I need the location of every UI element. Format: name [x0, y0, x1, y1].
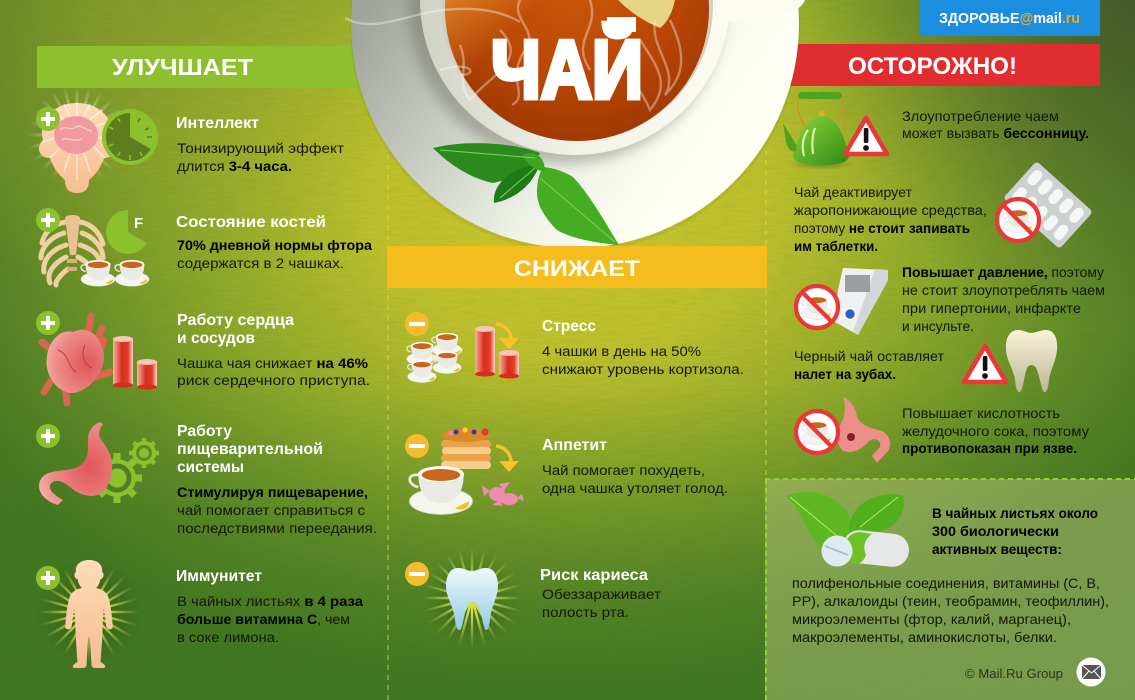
icon: no tea sign [997, 199, 1039, 241]
icon: pie chart 70% fluoride: F [134, 215, 143, 232]
item: intellect [21, 79, 345, 193]
item: ulcer [796, 397, 1089, 463]
banner: yellow, reduces [387, 246, 767, 288]
badge: minus [405, 434, 429, 458]
text: intellect [177, 140, 345, 174]
icon: two tea cups [81, 260, 149, 286]
text: appetite: Чай помогает похудеть, [542, 462, 705, 478]
mint leaves [433, 143, 619, 245]
text: digestion: чай помогает справиться с [177, 502, 365, 518]
text: bones: содержатся в 2 чашках. [177, 255, 344, 271]
badge: minus [405, 312, 429, 336]
text: appetite: одна чашка утоляет голод. [542, 480, 728, 496]
icon: pie chart 70% fluoride [106, 210, 147, 254]
banner: red, caution [785, 44, 1100, 86]
text: blood pressure [902, 264, 1105, 334]
icon: stomach [39, 422, 112, 505]
text: pills: поэтому не стоит запивать [794, 220, 970, 236]
heading: heart [177, 312, 294, 347]
icon: blue tooth with rays [416, 542, 528, 654]
text: pills: Чай деактивирует [794, 184, 913, 200]
panel: improves [21, 79, 377, 668]
heading: appetite: Аппетит [542, 437, 607, 454]
item: insomnia [783, 92, 1089, 170]
icon: green kettle [783, 92, 856, 170]
item: tooth stain [794, 330, 1057, 392]
text: digestion: последствиями переедания. [177, 520, 377, 536]
icon: no tea sign [796, 286, 838, 328]
icon: warning triangle [964, 346, 1006, 382]
item: digestion [36, 422, 377, 536]
banner: green, improves: УЛУЧШАЕТ [112, 54, 253, 80]
text: leaves intro: В чайных листьях около [932, 505, 1098, 521]
icon: rib cage [41, 215, 103, 285]
heading: stress: Стресс [542, 318, 596, 335]
text: immunity: В чайных листьях в 4 раза [177, 593, 363, 609]
item: pills [794, 161, 1093, 254]
heading: digestion: системы [177, 459, 244, 476]
text: blood pressure: при гипертонии, инфаркте [902, 300, 1081, 316]
text: pills: жаропонижающие средства, [794, 202, 987, 218]
heading: heart: Работу сердца [177, 312, 294, 329]
icon: heart [42, 316, 110, 403]
badge: plus [36, 424, 60, 448]
banner: green, improves [37, 46, 362, 88]
logo: Здоровье@mail.ru: ЗДОРОВЬЕ@mail.ru [939, 10, 1080, 27]
icon: stained tooth [1006, 330, 1057, 392]
text: leaves intro: 300 биологически [932, 523, 1059, 539]
icon: warning triangle [845, 118, 887, 154]
text: stress: снижают уровень кортизола. [542, 361, 744, 377]
illustration: cup of tea on saucer [345, 0, 805, 252]
heading: digestion: Работу [177, 423, 232, 440]
icon: four tea cups [407, 333, 462, 383]
item: stress [405, 312, 744, 383]
heading: immunity: Иммунитет [176, 568, 262, 585]
text: list of substances [792, 575, 1109, 645]
text: immunity: больше витамина С, чем [177, 611, 350, 627]
icon: pancakes [441, 428, 491, 469]
icon: leaves and pills [786, 492, 910, 568]
icon: child with rays [33, 556, 145, 668]
heading: intellect: Интеллект [176, 115, 259, 132]
text: insomnia: может вызвать бессонницу. [902, 125, 1089, 141]
heading: bones: Состояние костей [176, 214, 326, 231]
text: heart: Чашка чая снижает на 46% [177, 355, 369, 371]
text: heart [177, 355, 370, 388]
text: intellect: длится 3-4 часа. [177, 158, 292, 174]
item: blood pressure [796, 264, 1105, 335]
credit: © Mail.Ru Group [965, 667, 1063, 681]
text: list of substances: макроэлементы, аминокислоты, белки. [792, 629, 1057, 645]
text: list of substances: микроэлементы (фтор, калий, марганец), [792, 611, 1071, 627]
badge: plus [36, 208, 60, 232]
text: list of substances: РР), алкалоиды (теин, теобрамин, теофиллин), [792, 593, 1109, 609]
icon: stomach with ulcer [837, 397, 890, 463]
icon: head with glowing brain [21, 79, 133, 193]
badge: plus [36, 311, 60, 335]
text: insomnia [902, 108, 1089, 141]
text: tooth stain: налет на зубах. [794, 366, 896, 382]
banner: red, caution: ОСТОРОЖНО! [848, 53, 1017, 80]
text: ulcer: противопоказан при язве. [902, 440, 1077, 456]
item: bones [36, 208, 372, 286]
item: appetite [405, 428, 728, 514]
icon: mail envelope [1076, 658, 1106, 686]
badge: plus [36, 107, 60, 131]
title: ЧАЙ [491, 22, 643, 116]
text: pills: им таблетки. [794, 238, 878, 254]
banner: yellow, reduces: СНИЖАЕТ [514, 256, 641, 281]
steam [345, 0, 681, 110]
text: digestion [177, 484, 377, 536]
item: caries [405, 542, 662, 654]
text: blood pressure: Повышает давление, поэтому [902, 264, 1104, 280]
logo: Здоровье@mail.ru [919, 0, 1100, 36]
text: immunity: в соке лимона. [177, 629, 279, 645]
icon: blood pressure monitor [835, 268, 888, 335]
text: blood pressure: и инсульте. [902, 318, 974, 334]
text: heart: риск сердечного приступа. [177, 372, 370, 388]
text: leaves intro: активных веществ: [932, 541, 1062, 557]
text: leaves intro [932, 505, 1098, 557]
heading: digestion: пищеварительной [177, 441, 323, 458]
icon: blister of pills [1003, 161, 1093, 249]
text: stress [542, 343, 744, 377]
chart: heart risk bars [113, 336, 157, 390]
text: ulcer [902, 405, 1089, 456]
text: digestion: Стимулируя пищеварение, [177, 484, 368, 500]
text: caries: полость рта. [542, 604, 629, 620]
text: caries [542, 586, 662, 620]
text: ulcer: желудочного сока, поэтому [902, 423, 1089, 439]
text: tooth stain [794, 348, 945, 382]
icon: tea cup with lemon [410, 466, 472, 514]
panel: reduces [387, 246, 767, 654]
text: pills [794, 184, 987, 254]
text: insomnia: Злоупотребление чаем [902, 108, 1059, 124]
text: tooth stain: Черный чай оставляет [794, 348, 945, 364]
item: immunity [33, 556, 363, 668]
icon: no tea sign [796, 411, 838, 453]
panel: biologically active substances [765, 479, 1135, 700]
text: caries: Обеззараживает [542, 586, 662, 602]
icon: clock 3-4 hours [104, 111, 156, 163]
icon: gears [92, 438, 159, 503]
text: appetite [542, 462, 728, 496]
heading: digestion [177, 423, 323, 476]
text: immunity [177, 593, 363, 645]
icon: arrow down [496, 446, 519, 472]
chart: cortisol bars with arrow [475, 324, 519, 378]
heading: caries: Риск кариеса [540, 567, 648, 584]
heading: heart: и сосудов [177, 330, 255, 347]
text: intellect: Тонизирующий эффект [177, 140, 345, 156]
text: bones: 70% дневной нормы фтора [177, 237, 372, 253]
item: heart [36, 311, 370, 403]
text: stress: 4 чашки в день на 50% [542, 343, 701, 359]
text: ulcer: Повышает кислотность [902, 405, 1060, 421]
panel: caution [783, 92, 1105, 463]
text: list of substances: полифенольные соединения, витамины (С, В, [792, 575, 1100, 591]
icon: candies [482, 482, 524, 506]
text: bones [177, 237, 372, 271]
badge: plus [36, 566, 60, 590]
badge: minus [405, 562, 429, 586]
text: blood pressure: не стоит злоупотреблять чаем [902, 282, 1105, 298]
